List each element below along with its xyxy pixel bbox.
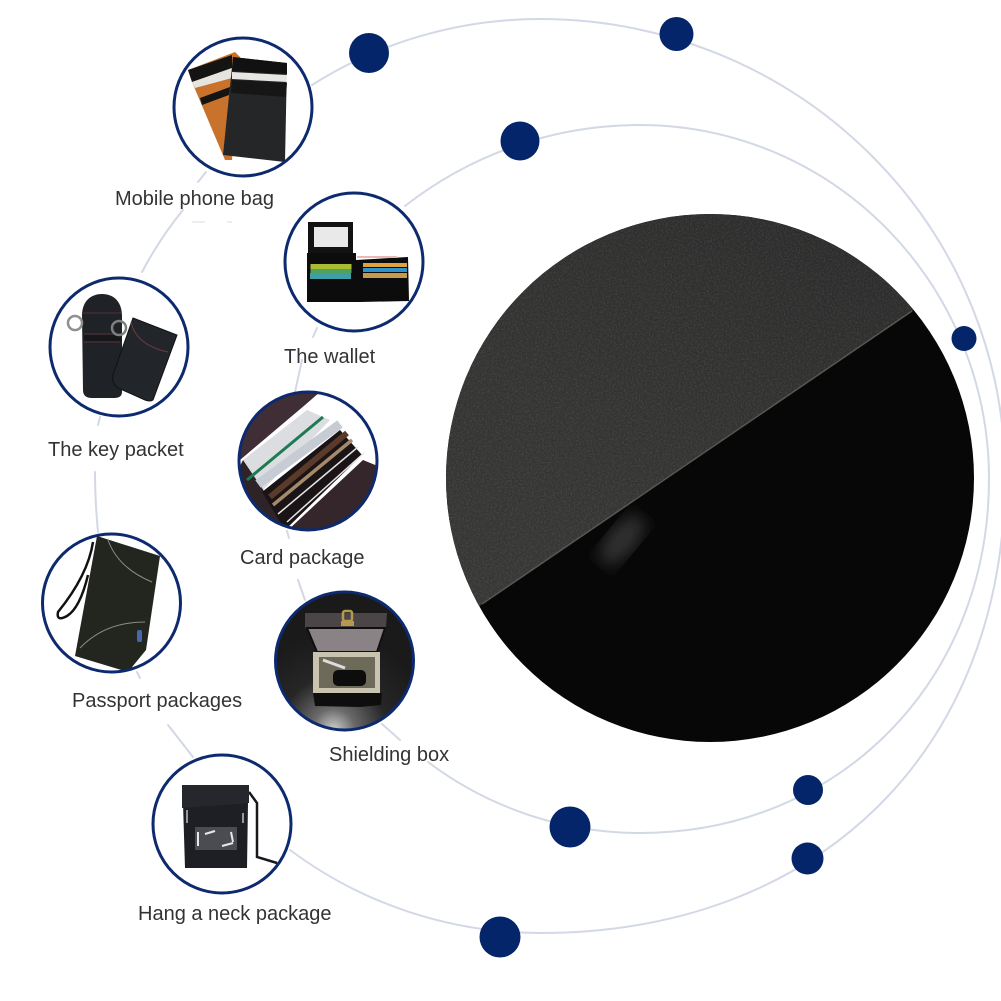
glow on black lower half [594, 510, 650, 570]
item: neck package [153, 755, 291, 893]
item: shielding box [276, 592, 414, 730]
item: passport package [42, 534, 180, 672]
label: neck package: Hang a neck package [138, 903, 331, 925]
item: wallet [285, 193, 423, 331]
label: card package: Card package [240, 547, 365, 569]
item: key packet [50, 278, 188, 416]
label: key packet: The key packet [48, 439, 184, 461]
label: mobile phone bag: Mobile phone bag [115, 188, 274, 210]
label: shielding box: Shielding box [329, 744, 449, 766]
item: mobile phone bag [174, 38, 312, 176]
item: card package [238, 392, 380, 535]
fabric texture [446, 214, 913, 606]
label: passport packages: Passport packages [72, 690, 242, 712]
grey textured upper half [446, 214, 914, 606]
inner orbit ring [287, 125, 989, 833]
large fabric circle [446, 214, 974, 742]
label: wallet: The wallet [284, 346, 376, 368]
node dots [349, 17, 976, 958]
